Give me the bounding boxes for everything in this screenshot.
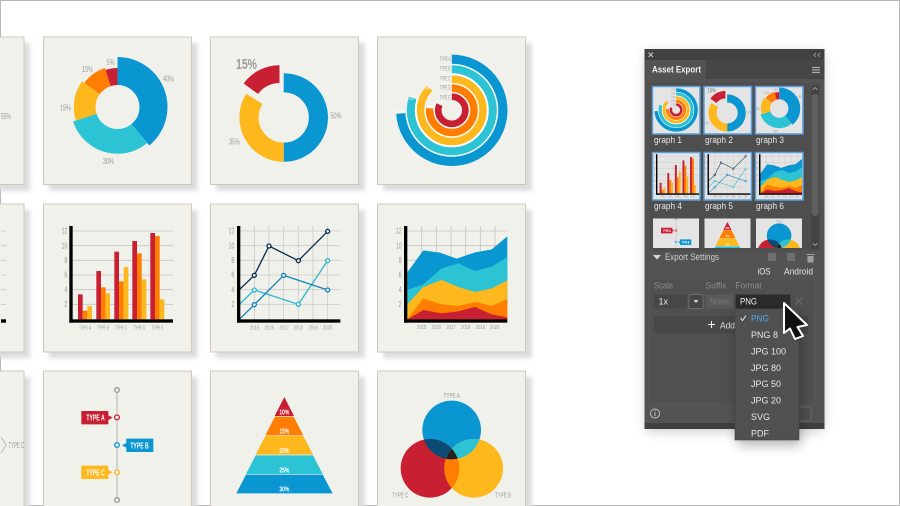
card: radial bar chart: 60% [426, 104, 434, 110]
thumbnail: graph 4 [652, 152, 700, 211]
format dropdown menu: JPG 50 [751, 379, 781, 389]
card: radial bar chart: TYPE E [440, 95, 450, 101]
card: stacked area chart: 2017 [446, 325, 456, 331]
card: donut chart with exploded segment: 35% [229, 138, 240, 146]
export settings header: Export Settings [665, 252, 719, 262]
thumbnail: graph 2: graph 2 [705, 135, 733, 145]
thumbnail: graph 3: graph 3 [756, 135, 784, 145]
card: venn diagram [378, 371, 532, 506]
card: line chart: 12 [229, 227, 235, 236]
card: bar chart: TYPE E [151, 325, 164, 331]
platform presets: Android [784, 266, 813, 276]
card: bar chart: 8 [64, 256, 68, 265]
card: venn diagram: TYPE C [392, 491, 409, 500]
add scale button: Add [720, 320, 735, 330]
card: pyramid chart: 20% [279, 448, 290, 455]
card: stacked area chart: 10 [396, 241, 402, 250]
card: line chart: 2017 [279, 325, 289, 331]
card: venn diagram: TYPE A [443, 391, 460, 400]
card: bar chart: TYPE C [115, 325, 127, 331]
card: radial bar chart [378, 37, 532, 190]
card: bar chart: 4 [64, 285, 68, 294]
tab: asset export [645, 60, 706, 79]
card: donut chart with five segments: 30% [103, 157, 114, 166]
format dropdown menu: PNG [751, 314, 769, 324]
icon: close [648, 52, 653, 57]
card: line chart [210, 204, 365, 358]
platform presets [758, 266, 813, 276]
card: donut chart with exploded segment: 50% [330, 112, 342, 120]
card: radial bar chart: 40% [436, 100, 444, 104]
card: radial bar chart: TYPE A [440, 57, 450, 63]
format dropdown menu: JPG 20 [751, 396, 781, 406]
thumbnail: graph 2 [704, 86, 752, 145]
export settings box: Suffix [706, 280, 727, 290]
suffix field: None [710, 296, 729, 306]
card column: partially cropped left cards [0, 37, 30, 506]
card: donut chart with exploded segment [210, 37, 365, 190]
card: venn diagram: TYPE B [495, 491, 511, 500]
card: stacked area chart: 4 [399, 285, 402, 294]
platform presets: iOS [758, 266, 770, 276]
card: donut chart with exploded segment: 15% [236, 56, 257, 73]
card: radial bar chart: 80% [425, 86, 432, 90]
card: stacked area chart: 2018 [461, 325, 470, 331]
export button [785, 407, 811, 421]
card: stacked area chart: 2020 [490, 325, 499, 331]
card: stacked area chart: 2 [399, 300, 402, 309]
card column: partially cropped left cards: TYPE C [8, 441, 24, 450]
card: stacked area chart: 2016 [432, 325, 441, 331]
thumbnail: graph 6 [756, 152, 803, 211]
card: timeline: TYPE C [86, 468, 105, 477]
thumbnail: graph 1 [652, 86, 700, 145]
card: donut chart with five segments: 5% [106, 58, 114, 67]
card: line chart: 2018 [294, 325, 303, 331]
card: bar chart: TYPE A [79, 325, 91, 331]
card: bar chart: 10 [62, 241, 68, 250]
card: stacked area chart: 2015 [417, 325, 426, 331]
card: radial bar chart: TYPE D [440, 85, 451, 91]
card: bar chart: 12 [62, 227, 68, 236]
card: donut chart with five segments: 10% [82, 65, 93, 74]
thumbnail: graph 1: graph 1 [654, 135, 682, 145]
card: pyramid chart: 15% [279, 429, 290, 436]
thumbnail: graph 3 [755, 86, 803, 145]
card column: partially cropped left cards: 55% [1, 112, 11, 121]
format dropdown menu: PDF [751, 428, 770, 438]
card: bar chart: TYPE B [97, 325, 109, 331]
scale field [654, 294, 703, 308]
card: timeline: TYPE B [130, 441, 149, 450]
card: bar chart: 6 [64, 271, 68, 280]
card: stacked area chart [378, 204, 532, 358]
card: timeline: TYPE A [86, 414, 105, 423]
card: radial bar chart: 120% [408, 96, 417, 100]
format dropdown menu: SVG [751, 412, 770, 422]
thumbnail: graph 6: graph 6 [756, 201, 784, 211]
thumbnail: graph 5 [704, 152, 752, 211]
card: bar chart: TYPE D [133, 325, 145, 331]
card: line chart: 2 [231, 300, 235, 309]
scale field: 1x [658, 296, 669, 306]
add scale button [654, 316, 808, 334]
card: radial bar chart: TYPE C [440, 76, 451, 82]
export settings box: Scale [654, 280, 673, 290]
card: donut chart with five segments: 15% [60, 104, 71, 112]
card: pyramid chart: 30% [279, 486, 290, 493]
card: line chart: 2016 [265, 325, 274, 331]
icon: collapse [814, 53, 820, 57]
card: line chart: 2019 [308, 325, 318, 331]
format dropdown [736, 294, 790, 308]
card: bar chart: 2 [64, 300, 68, 309]
card: line chart: 10 [229, 241, 235, 250]
card: timeline [44, 371, 198, 506]
export action icons [768, 253, 814, 262]
icon: info [650, 409, 660, 418]
card: pyramid chart [210, 371, 365, 506]
scrollbar [811, 85, 819, 250]
format dropdown: PNG [740, 296, 757, 306]
thumbnail: timeline [653, 218, 699, 248]
card: line chart: 2015 [250, 325, 259, 331]
tab: asset export: Asset Export [652, 64, 701, 74]
thumbnail: graph 5: graph 5 [705, 201, 733, 211]
icon: mouse cursor [784, 303, 807, 339]
format dropdown menu: PNG 8 [751, 330, 778, 340]
card: stacked area chart: 6 [399, 271, 402, 280]
card: donut chart with five segments [44, 37, 198, 190]
card: radial bar chart: TYPE B [440, 67, 450, 73]
thumbnail list background [649, 83, 821, 251]
export settings box: Format [736, 280, 762, 290]
format dropdown menu: JPG 100 [751, 346, 786, 356]
export settings box [650, 279, 814, 404]
card: line chart: 6 [231, 271, 235, 280]
card: donut chart with five segments: 40% [163, 74, 174, 84]
card: line chart: 2020 [323, 325, 332, 331]
thumbnail: pyramid [704, 218, 750, 248]
card: stacked area chart: 12 [396, 227, 402, 236]
format dropdown menu: JPG 80 [751, 363, 781, 373]
panel footer [644, 423, 824, 429]
thumbnail: venn [756, 218, 802, 248]
icon: panel menu [812, 68, 820, 72]
card: stacked area chart: 2019 [476, 325, 485, 331]
panel: asset export [644, 49, 824, 431]
card: line chart: 4 [231, 285, 235, 294]
card: stacked area chart: 8 [399, 256, 402, 265]
suffix field [706, 294, 733, 308]
remove icon [796, 298, 802, 304]
thumbnail: graph 4: graph 4 [654, 201, 682, 211]
card: line chart: 8 [231, 256, 235, 265]
card: pyramid chart: 10% [279, 409, 290, 416]
card: radial bar chart: 100% [396, 110, 404, 114]
format dropdown menu [735, 309, 801, 445]
card: bar chart [44, 204, 198, 358]
card: pyramid chart: 25% [279, 468, 290, 475]
